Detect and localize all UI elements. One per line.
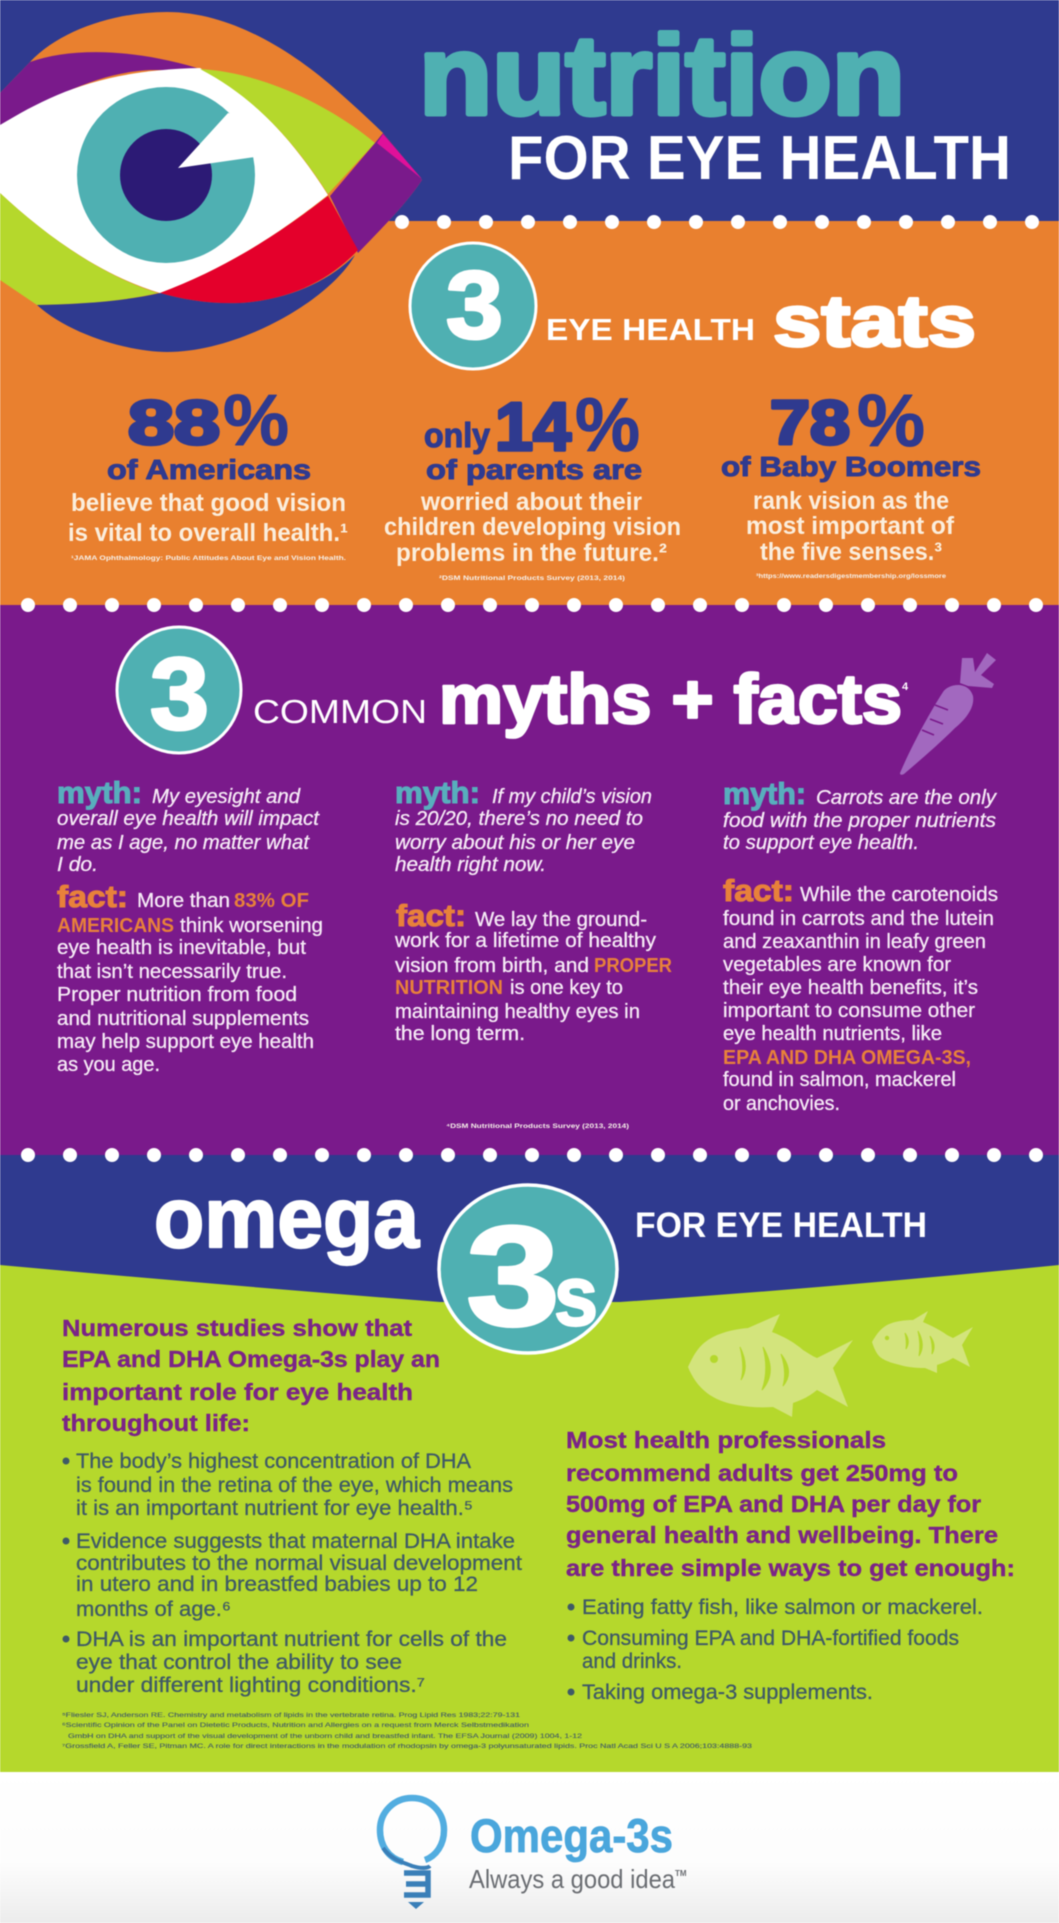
panel: stats band <box>0 221 1059 605</box>
myth and fact column 1 <box>57 775 323 1076</box>
stat: only 14% of parents: of parents are <box>426 454 642 485</box>
heading: 3 eye health stats <box>410 243 976 369</box>
bullet list: DHA facts: in utero and in breastfed babies up to 12 <box>76 1573 478 1596</box>
bullet list: DHA facts <box>62 1450 522 1697</box>
myth and fact column 3: and zeaxanthin in leafy green <box>723 931 986 953</box>
myth and fact column 2: fact: <box>396 898 466 933</box>
myth and fact column 2: NUTRITION <box>395 977 503 999</box>
myth and fact column 1: I do. <box>57 854 98 876</box>
bullet list: DHA facts: Evidence suggests that maternal DHA intake <box>76 1530 515 1553</box>
stat: 78% of Baby Boomers <box>721 379 981 580</box>
footnotes: omega-3 references: ⁵Fliesler SJ, Anderson RE. Chemistry and metabolism of lipids in the vertebrate retina. Prog Lipid Res 1983;22:79-131 <box>62 1712 521 1719</box>
bullet list: DHA facts: is found in the retina of the eye, which means <box>76 1474 513 1497</box>
stat: only 14% of parents: children developing vision <box>384 513 681 541</box>
title: FOR EYE HEALTH <box>508 124 1011 193</box>
number badge: 3: 3 <box>446 252 503 359</box>
myth and fact column 1: AMERICANS <box>57 915 174 937</box>
myth and fact column 3: their eye health benefits, it’s <box>723 977 978 999</box>
myth and fact column 2: worry about his or her eye <box>395 832 635 854</box>
number badge: 3 <box>117 627 241 753</box>
myth and fact column 3: food with the proper nutrients <box>723 810 996 832</box>
myth and fact column 3: EPA AND DHA OMEGA-3S, <box>723 1047 971 1069</box>
stat: 88% of Americans: 88 <box>128 389 220 458</box>
text block: omega-3 studies intro: EPA and DHA Omega-3s play an <box>62 1346 440 1372</box>
myth and fact column 1: eye health is inevitable, but <box>57 937 306 959</box>
myth and fact column 2 <box>394 775 673 1045</box>
text block: recommended intake: 500mg of EPA and DHA per day for <box>566 1491 981 1517</box>
text block: omega-3 studies intro: important role for eye health <box>62 1379 413 1405</box>
stat: only 14% of parents: worried about their <box>420 488 642 516</box>
icon: stylised eye <box>0 12 422 352</box>
panel: header band <box>0 0 1059 221</box>
myth and fact column 1: fact: <box>57 879 128 914</box>
myth and fact column 2: We lay the ground- <box>475 909 647 931</box>
bullet list: DHA facts: under different lighting conditions.⁷ <box>76 1674 425 1697</box>
bullet list: DHA facts: contributes to the normal visual development <box>76 1552 522 1575</box>
stat: 88% of Americans: believe that good vision <box>71 489 346 517</box>
stat: 88% of Americans: % <box>223 381 289 461</box>
stat: 78% of Baby Boomers: most important of <box>746 512 955 540</box>
text block: recommended intake <box>566 1427 1015 1581</box>
logo: Omega-3s: Omega-3s <box>470 1809 673 1862</box>
myth and fact column 1: and nutritional supplements <box>57 1008 309 1030</box>
heading: 3 common myths + facts: 4 <box>902 681 909 693</box>
myth and fact column 3: vegetables are known for <box>723 954 951 976</box>
myth and fact column 3: Carrots are the only <box>816 787 997 809</box>
bullet list: ways to get enough: Consuming EPA and DHA-fortified foods <box>582 1627 959 1650</box>
myth and fact column 1: me as I age, no matter what <box>57 832 310 854</box>
stat: 78% of Baby Boomers: rank vision as the <box>753 487 949 515</box>
myth and fact column 1: Proper nutrition from food <box>57 984 297 1006</box>
heading: omega 3s for eye health: omega <box>154 1171 420 1266</box>
stat: 88% of Americans: is vital to overall health.¹ <box>68 519 348 547</box>
bullet list: DHA facts: months of age.⁶ <box>76 1598 231 1621</box>
bullet list: DHA facts: DHA is an important nutrient for cells of the <box>76 1628 507 1651</box>
myth and fact column 2: is one key to <box>510 977 623 999</box>
myth and fact column 2: is 20/20, there’s no need to <box>395 808 643 830</box>
heading: 3 common myths + facts <box>117 627 909 753</box>
heading: omega 3s for eye health: FOR EYE HEALTH <box>635 1206 927 1245</box>
stat: 88% of Americans <box>68 381 348 562</box>
text block: omega-3 studies intro <box>62 1315 440 1436</box>
stat: 78% of Baby Boomers: % <box>857 379 925 462</box>
logo: Omega-3s: Always a good idea <box>469 1864 675 1894</box>
myth and fact column 1: may help support eye health <box>57 1031 314 1053</box>
bullet list: DHA facts: The body’s highest concentration of DHA <box>76 1450 471 1473</box>
title: nutrition <box>419 13 905 138</box>
stat: only 14% of parents: only <box>424 417 490 455</box>
stat: 78% of Baby Boomers: the five senses.³ <box>760 538 942 566</box>
myth and fact column 2: work for a lifetime of healthy <box>394 930 656 952</box>
footnotes: omega-3 references: ⁶Scientific Opinion of the Panel on Dietetic Products, Nutrition and Allergies on a request from Merck Selbstmedikation <box>62 1722 530 1729</box>
myth and fact column 3: important to consume other <box>723 1000 975 1022</box>
footnotes: omega-3 references <box>62 1712 753 1750</box>
myth and fact column 3: to support eye health. <box>723 832 919 854</box>
myth and fact column 3 <box>723 776 998 1115</box>
myth and fact column 1: myth: <box>57 775 142 810</box>
footnotes: omega-3 references: GmbH on DHA and support of the visual development of the unborn child and breastfed infant. The EFSA Journal (2009) 1004, 1-12 <box>68 1733 583 1740</box>
panel: logo footer <box>0 1772 1059 1923</box>
bullet list: DHA facts: it is an important nutrient for eye health.⁵ <box>76 1497 473 1520</box>
myth and fact column 1: 83% OF <box>234 890 309 912</box>
icon: small fish <box>872 1311 973 1373</box>
logo: Omega-3s: TM <box>675 1869 687 1878</box>
panel: omega-3s header band <box>0 1155 1059 1305</box>
myth and fact column 3: found in carrots and the lutein <box>723 908 994 930</box>
stat: 78% of Baby Boomers: ³https://www.readersdigestmembership.org/lossmore <box>756 573 946 580</box>
footnotes: omega-3 references: ⁷Grossfield A, Feller SE, Pitman MC. A role for direct interactions in the modulation of rhodopsin by omega-3 polyunsaturated lipids. Proc Natl Acad Sci U S A 2006;103:4888-93 <box>62 1743 753 1750</box>
stat: 88% of Americans: ¹JAMA Ophthalmology: Public Attitudes About Eye and Vision Health. <box>71 555 346 562</box>
myth and fact column 1: My eyesight and <box>152 786 301 808</box>
stat: only 14% of parents: problems in the future.² <box>396 539 667 567</box>
bullet list: ways to get enough <box>568 1596 983 1704</box>
heading: 3 eye health stats: stats <box>773 282 976 362</box>
text block: recommended intake: Most health professionals <box>566 1427 886 1453</box>
stat: 78% of Baby Boomers: 78 <box>770 389 850 458</box>
heading: omega 3s for eye health <box>154 1171 927 1356</box>
logo: Omega-3s <box>380 1798 687 1909</box>
myth and fact column 2: myth: <box>395 775 480 810</box>
myth and fact column 3: fact: <box>723 873 794 908</box>
stat: 88% of Americans: of Americans <box>107 454 311 485</box>
myth and fact column 3: or anchovies. <box>723 1093 840 1115</box>
myth and fact column 3: found in salmon, mackerel <box>723 1069 956 1091</box>
stat: 78% of Baby Boomers: of Baby Boomers <box>721 451 981 482</box>
icon: light bulb <box>380 1798 444 1909</box>
bullet list: ways to get enough: Taking omega-3 supplements. <box>582 1681 873 1704</box>
myth and fact column 1: overall eye health will impact <box>57 808 320 830</box>
number badge: 3s: s <box>554 1249 598 1344</box>
bullet list: ways to get enough: and drinks. <box>582 1650 682 1673</box>
title <box>419 13 1011 193</box>
myth and fact column 3: While the carotenoids <box>800 884 998 906</box>
myth and fact column 1: as you age. <box>57 1054 160 1076</box>
heading: 3 common myths + facts: myths + facts <box>439 660 902 738</box>
heading: 3 eye health stats: EYE HEALTH <box>546 312 755 347</box>
number badge: 3 <box>410 243 536 369</box>
icon: large fish <box>688 1314 853 1417</box>
number badge: 3: 3 <box>150 637 209 751</box>
text block: recommended intake: general health and wellbeing. There <box>566 1522 998 1548</box>
text block: recommended intake: are three simple ways to get enough: <box>566 1555 1015 1581</box>
text block: omega-3 studies intro: Numerous studies show that <box>62 1315 412 1341</box>
stat: only 14% of parents: % <box>575 383 640 468</box>
myth and fact column 3: eye health nutrients, like <box>723 1023 942 1045</box>
stat: only 14% of parents: ²DSM Nutritional Products Survey (2013, 2014) <box>439 575 625 582</box>
myth and fact column 2: health right now. <box>395 854 546 876</box>
number badge: 3s <box>439 1185 617 1356</box>
myth and fact column 2: PROPER <box>594 955 673 977</box>
icon: carrot <box>900 653 996 775</box>
bullet list: ways to get enough: Eating fatty fish, like salmon or mackerel. <box>582 1596 983 1619</box>
panel: myths band <box>0 605 1059 1155</box>
panel: omega-3s green body <box>0 1265 1059 1772</box>
myth and fact column 1: that isn’t necessarily true. <box>57 961 287 983</box>
footnote: myths source: ⁴DSM Nutritional Products Survey (2013, 2014) <box>446 1123 629 1130</box>
heading: 3 common myths + facts: COMMON <box>253 693 427 730</box>
myth and fact column 3: myth: <box>723 776 806 811</box>
myth and fact column 1: think worsening <box>180 915 323 937</box>
text block: omega-3 studies intro: throughout life: <box>62 1410 250 1436</box>
number badge: 3s: 3 <box>466 1197 560 1356</box>
myth and fact column 2: the long term. <box>395 1023 525 1045</box>
stat: only 14% of parents <box>384 383 681 582</box>
myth and fact column 2: If my child’s vision <box>492 786 652 808</box>
myth and fact column 1: More than <box>137 890 230 912</box>
stat: only 14% of parents: 14 <box>495 389 571 465</box>
myth and fact column 2: maintaining healthy eyes in <box>395 1001 640 1023</box>
text block: recommended intake: recommend adults get 250mg to <box>566 1460 958 1486</box>
myth and fact column 2: vision from birth, and <box>395 955 589 977</box>
bullet list: DHA facts: eye that control the ability to see <box>76 1651 402 1674</box>
